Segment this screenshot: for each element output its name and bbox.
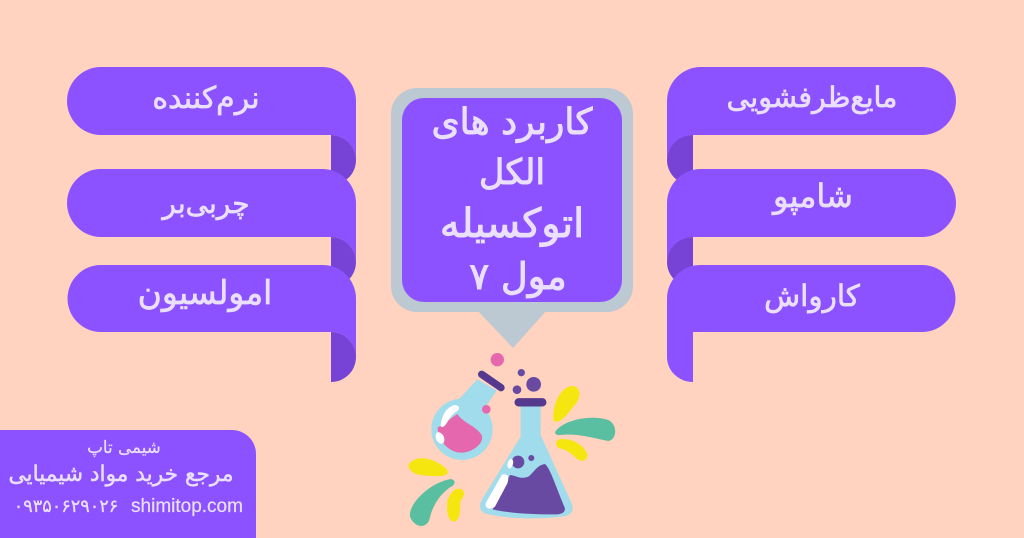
title: مول ۷	[469, 255, 567, 298]
title: الکل	[479, 153, 545, 193]
tail: right ribbon 1	[667, 135, 693, 185]
callout frame	[391, 88, 633, 312]
icon: round flask	[431, 374, 501, 460]
tagline: مرجع خرید مواد شیمیایی	[8, 462, 234, 487]
panel: contact card	[0, 430, 256, 538]
ribbon: کارواش: کارواش	[764, 279, 861, 313]
central callout	[391, 88, 633, 348]
icon: chemistry flasks	[408, 353, 615, 526]
ribbon: امولسیون: امولسیون	[138, 273, 272, 312]
ribbon: امولسیون	[68, 265, 356, 382]
tail: left ribbon 2	[331, 237, 356, 287]
contact card background	[0, 430, 256, 538]
ribbon: شامپو	[667, 169, 956, 262]
title	[432, 102, 593, 298]
ribbon: شامپو: شامپو	[771, 177, 853, 215]
ribbon: چربی‌بر: چربی‌بر	[160, 187, 250, 220]
title: اتوکسیله	[440, 201, 584, 247]
brand name: شیمی تاپ	[87, 437, 161, 458]
phone number: ۰۹۳۵۰۶۲۹۰۲۶	[14, 497, 118, 517]
ribbon: چربی‌بر	[67, 169, 356, 262]
icon: bubbles	[491, 353, 541, 394]
website: shimitop.com	[131, 496, 243, 517]
title: کاربرد های	[432, 102, 593, 143]
icon: left splashes	[408, 458, 464, 526]
ribbon: کارواش	[667, 265, 955, 382]
icon: right splashes	[553, 386, 615, 461]
tail: left ribbon 1	[331, 135, 356, 185]
callout pointer	[477, 310, 547, 348]
ribbon: مایع‌ظرفشویی	[667, 67, 956, 160]
ribbon: نرم‌کننده	[67, 67, 356, 160]
right ribbon list	[667, 67, 956, 382]
callout panel	[402, 98, 622, 302]
ribbon: نرم‌کننده: نرم‌کننده	[152, 81, 260, 116]
ribbon: مایع‌ظرفشویی: مایع‌ظرفشویی	[727, 81, 897, 114]
icon: conical flask	[480, 402, 573, 518]
left ribbon list	[67, 67, 356, 382]
tail: right ribbon 2	[667, 237, 693, 287]
